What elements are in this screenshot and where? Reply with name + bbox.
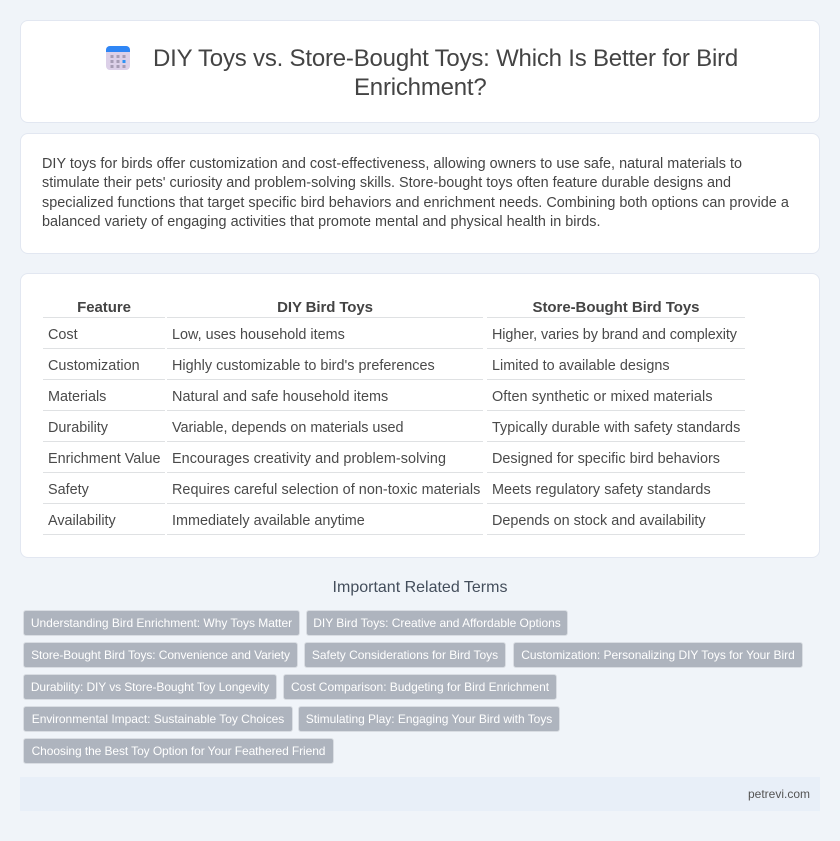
table: comparison: Limited to available designs bbox=[492, 358, 670, 374]
related term chips: Safety Considerations for Bird Toys bbox=[312, 648, 498, 662]
panel: header bbox=[20, 20, 820, 123]
related term chips: Stimulating Play: Engaging Your Bird with Toys bbox=[306, 712, 552, 726]
related term chips: Store-Bought Bird Toys: Convenience and Variety bbox=[31, 648, 290, 662]
related term chips: Customization: Personalizing DIY Toys for Your Bird bbox=[521, 648, 795, 662]
table: comparison: Meets regulatory safety standards bbox=[492, 482, 711, 498]
related term chips: Durability: DIY vs Store-Bought Toy Longevity bbox=[31, 680, 269, 694]
table: comparison: Higher, varies by brand and complexity bbox=[492, 327, 737, 343]
table: comparison: Immediately available anytime bbox=[172, 513, 365, 529]
related term chips: DIY Bird Toys: Creative and Affordable Options bbox=[313, 616, 561, 630]
related term chips: Understanding Bird Enrichment: Why Toys Matter bbox=[31, 616, 292, 630]
table: comparison: Feature bbox=[77, 299, 131, 316]
related term chips: Choosing the Best Toy Option for Your Feathered Friend bbox=[32, 744, 325, 758]
table: comparison: Encourages creativity and problem-solving bbox=[172, 451, 446, 467]
table: comparison: Designed for specific bird behaviors bbox=[492, 451, 720, 467]
title bbox=[153, 45, 738, 101]
table: comparison: Requires careful selection of non-toxic materials bbox=[172, 482, 480, 498]
table: comparison: Often synthetic or mixed materials bbox=[492, 389, 713, 405]
table: comparison: Enrichment Value bbox=[48, 451, 161, 467]
table: comparison: Highly customizable to bird's preferences bbox=[172, 358, 435, 374]
text: introduction paragraph bbox=[42, 156, 789, 230]
title: Enrichment? bbox=[354, 74, 487, 101]
text: introduction paragraph: specialized functions that target specific bird behaviors and enrichment needs. Combining both options can provide a bbox=[42, 195, 789, 211]
table: comparison: Cost bbox=[48, 327, 78, 343]
icon: calendar bbox=[106, 46, 130, 70]
heading: important related terms: Important Related Terms bbox=[333, 579, 507, 596]
table: comparison: Materials bbox=[48, 389, 106, 405]
panel: comparison table bbox=[20, 273, 820, 558]
related term chips: Cost Comparison: Budgeting for Bird Enrichment bbox=[291, 680, 549, 694]
text: introduction paragraph: balanced variety of engaging activities that promote mental and physical health in birds. bbox=[42, 214, 601, 230]
table: comparison: Safety bbox=[48, 482, 89, 498]
related term chips: Environmental Impact: Sustainable Toy Choices bbox=[32, 712, 284, 726]
panel: introduction bbox=[20, 133, 820, 254]
table: comparison: Store-Bought Bird Toys bbox=[533, 299, 699, 316]
related term chips bbox=[23, 610, 803, 764]
table: comparison: Durability bbox=[48, 420, 108, 436]
table: comparison: Variable, depends on materials used bbox=[172, 420, 403, 436]
text: introduction paragraph: DIY toys for birds offer customization and cost-effectiveness, allowing owners to use safe, natural materials to bbox=[42, 156, 742, 172]
table: comparison: Typically durable with safety standards bbox=[492, 420, 740, 436]
table: comparison: Low, uses household items bbox=[172, 327, 345, 343]
text: introduction paragraph: stimulate their pets' curiosity and problem-solving skills. Store-bought toys often feature durable designs and bbox=[42, 175, 731, 191]
table: comparison: Customization bbox=[48, 358, 140, 374]
text: site name: petrevi.com bbox=[748, 787, 810, 801]
table: comparison: Availability bbox=[48, 513, 116, 529]
table: comparison: DIY Bird Toys bbox=[277, 299, 373, 316]
title: DIY Toys vs. Store-Bought Toys: Which Is Better for Bird bbox=[153, 45, 738, 72]
table: comparison: Natural and safe household items bbox=[172, 389, 388, 405]
table: comparison: Depends on stock and availability bbox=[492, 513, 706, 529]
table: comparison bbox=[43, 299, 745, 535]
footer bbox=[20, 777, 820, 811]
